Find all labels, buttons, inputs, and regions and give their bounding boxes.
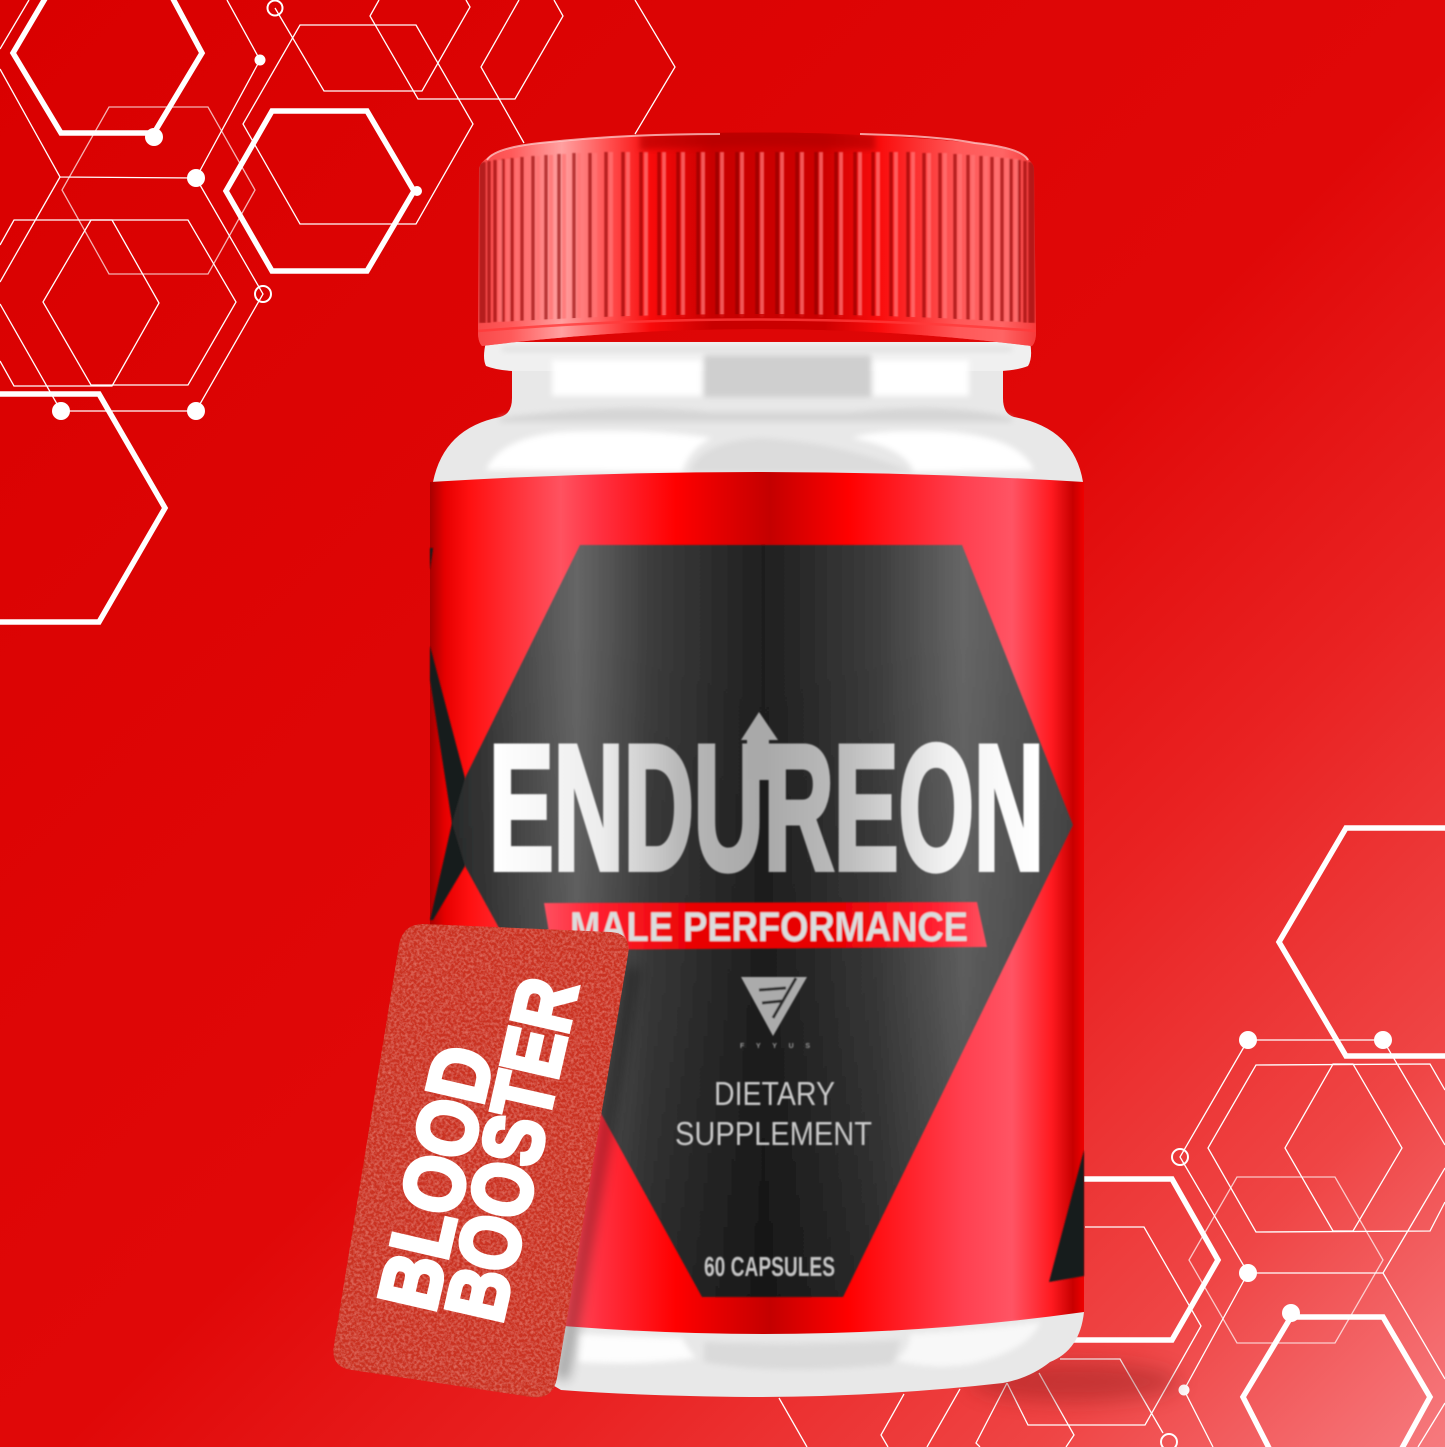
ring nodes, bottom right <box>1161 1149 1188 1447</box>
icon: fyyus logo <box>740 977 810 1050</box>
banner: male performance: MALE PERFORMANCE <box>570 903 968 950</box>
network nodes, top left <box>52 54 422 420</box>
icon: up arrow in U <box>741 712 778 780</box>
hexagon network: top left <box>0 0 675 622</box>
logo wordmark: ENDUREON <box>489 708 1044 907</box>
panel: product bottle <box>430 120 1084 1397</box>
card text: booster: BOOSTER <box>428 970 595 1329</box>
text: dietary supplement: SUPPLEMENT <box>675 1115 872 1152</box>
cap ribs <box>481 152 1033 323</box>
card shadow <box>556 965 640 1380</box>
ring nodes, top left <box>255 0 282 302</box>
thin hexagons, bottom right <box>779 1040 1445 1447</box>
thin hexagons, top left <box>0 0 675 411</box>
label wrap <box>430 472 1084 1334</box>
text: dietary supplement <box>675 1075 872 1152</box>
cap <box>470 120 1045 350</box>
card text: blood: BLOOD <box>361 1038 511 1318</box>
cap top rim <box>485 138 1020 160</box>
text: 60 capsules: 60 CAPSULES <box>704 1251 835 1282</box>
label dark hexagon <box>452 545 1073 1297</box>
cap lower lip <box>478 314 1036 346</box>
icon: fyyus logo: FYYUS <box>740 1043 810 1050</box>
bottom highlights <box>578 1322 1040 1370</box>
neck ring <box>484 342 1031 371</box>
neck highlights <box>486 347 1034 472</box>
network nodes, bottom right <box>1178 1031 1392 1396</box>
bottle body <box>430 368 1084 1397</box>
label dark x strips <box>430 548 1084 1282</box>
hexagon network: bottom right <box>779 828 1445 1447</box>
callout card: blood booster <box>333 924 629 1397</box>
bottle floor shadow <box>970 1362 1180 1402</box>
text: dietary supplement: DIETARY <box>714 1075 835 1112</box>
thick hexagons, top left <box>0 0 414 622</box>
card body <box>333 924 629 1397</box>
thick hexagons, bottom right <box>1070 828 1445 1447</box>
